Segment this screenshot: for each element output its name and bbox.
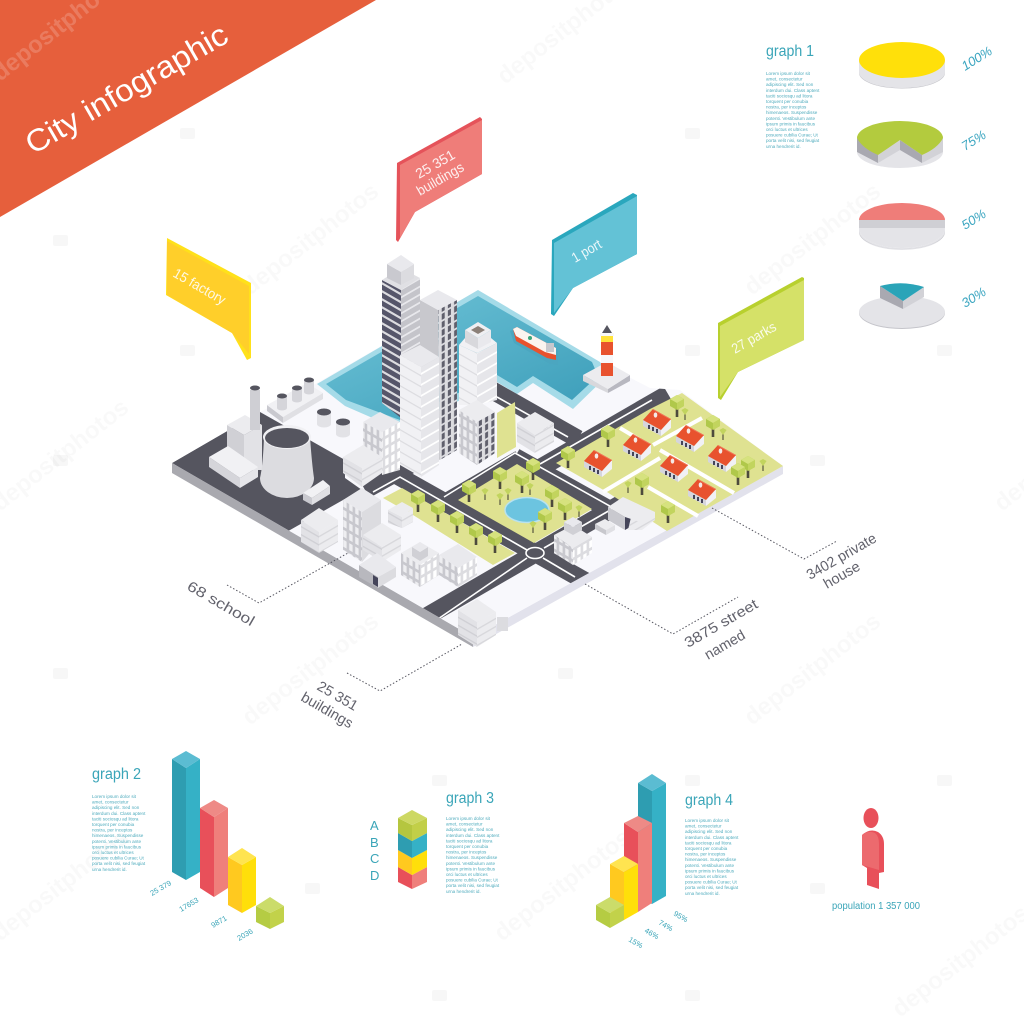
graph 3 legend letters: D [370, 868, 379, 883]
graph 3 text: orci luctus et ultrices [446, 872, 488, 877]
bar value labels: 46% [643, 926, 661, 941]
houses [584, 409, 736, 506]
callout: 27 parks: 27 parks [728, 318, 779, 357]
bar: 2036 [236, 897, 284, 943]
callout: 27 parks [718, 277, 804, 400]
graph 2 text: taciti sociosqu ad litora [92, 816, 139, 821]
leader: 3875 street named: named [702, 627, 748, 663]
callout: 25 351 buildings: 25 351 [412, 146, 458, 182]
graph 2 text: urna hendrerit id. [92, 867, 127, 872]
graph 4 text: torquent per conubia [685, 846, 728, 851]
population label: population 1 357 000 [832, 901, 920, 912]
graph 4 heading: graph 4 [685, 792, 733, 809]
watermarks: depositphotos [739, 178, 886, 301]
leader: 68 school [184, 553, 348, 630]
bar: 9871: 9871 [210, 914, 228, 930]
building: small stack [388, 502, 413, 528]
leader: 68 school: 68 school [184, 579, 257, 630]
storage tanks [317, 408, 350, 438]
bar: 9871 [210, 848, 256, 930]
pie: 75% [857, 121, 989, 168]
stacked column: graph 3 [398, 810, 427, 889]
graph 2 heading: graph 2 [92, 766, 141, 783]
graph 1 text: taciti sociosqu ad litora [766, 93, 813, 98]
graph 4 text: interdum dui. Class aptent [685, 835, 739, 840]
graph 3 legend letters: C [370, 851, 379, 866]
bar value labels: 15% [627, 935, 645, 950]
graph 1 text: posuere cubilia Curae; Ut [766, 133, 819, 138]
graph 2 text: amet, consectetur [92, 800, 129, 805]
graph 4 text: orci luctus et ultrices [685, 874, 727, 879]
block with windows [459, 400, 495, 465]
graph 2 text: himenaeos. Suspendisse [92, 833, 144, 838]
watermarks: depositphotos [237, 178, 384, 301]
housing block lawn [556, 393, 783, 531]
low stacked block [343, 445, 382, 487]
watermarks: depositphotos [237, 608, 384, 731]
graph 1 text: Lorem ipsum dolor sit [766, 71, 811, 76]
bar value labels: 95% [672, 909, 690, 924]
graph 2 text: potenti. Vestibulum ante [92, 839, 141, 844]
building: garage [359, 553, 396, 588]
building: school tower [343, 488, 381, 562]
bar: 2036: 2036 [236, 927, 254, 943]
graph 3 text: torquent per conubia [446, 844, 489, 849]
graph 3 text: nostra, per inceptos [446, 850, 487, 855]
graph 1 text: urna hendrerit id. [766, 144, 801, 149]
graph 2 text: adipiscing elit. Sed non [92, 805, 140, 810]
graph 2 text: torquent per conubia [92, 822, 135, 827]
callout: 25 351 buildings [396, 117, 482, 242]
graph 3 text: porta velit nisi, sed feugiat [446, 883, 500, 888]
pie: 50%: 50% [959, 206, 989, 233]
callout: 1 port: 1 port [568, 236, 604, 266]
graph 2 text: Lorem ipsum dolor sit [92, 794, 137, 799]
graph 4 text: amet, consectetur [685, 824, 722, 829]
graph 1 text: ipsum primis in faucibus [766, 121, 816, 126]
graph 4 text: taciti sociosqu ad litora [685, 840, 732, 845]
roundabout [526, 548, 544, 558]
leader: 3875 street named: 3875 street [682, 597, 761, 651]
crossing building with cap [554, 517, 592, 565]
callout: 15 factory: 15 factory [170, 265, 229, 308]
trees [411, 395, 767, 553]
graph 3 legend letters: B [370, 835, 379, 850]
graph 1 text: nostra, per inceptos [766, 105, 807, 110]
graph 1 text: himenaeos. Suspendisse [766, 110, 818, 115]
title: City infographic [19, 17, 234, 161]
graph 4 text: Lorem ipsum dolor sit [685, 818, 730, 823]
graph 2 text: interdum dui. Class aptent [92, 811, 146, 816]
building behind tower [363, 412, 400, 475]
leader: 25 351 buildings: buildings [298, 690, 356, 732]
park: rear patch [497, 402, 516, 458]
watermarks: depositphotos [739, 608, 886, 731]
bar: 74% [624, 816, 652, 912]
bar value labels [627, 909, 690, 950]
graph 4 text: himenaeos. Suspendisse [685, 857, 737, 862]
bar: 25 379 [148, 751, 200, 898]
graph 3 text: amet, consectetur [446, 822, 483, 827]
callout: 25 351 buildings: buildings [414, 159, 467, 199]
bar: 46% [610, 856, 638, 920]
graph 4 text: porta velit nisi, sed feugiat [685, 885, 739, 890]
building: twin school [439, 544, 477, 587]
right stepped tower [459, 322, 497, 405]
graph 3 legend letters: A [370, 818, 379, 833]
graph 3 text: himenaeos. Suspendisse [446, 855, 498, 860]
title banner [0, 0, 376, 217]
leader: 3875 street named [585, 584, 761, 663]
building: front block [363, 523, 401, 562]
bar: 25 379: 25 379 [148, 878, 173, 898]
park: left strip [383, 488, 515, 565]
graph 4 text: urna hendrerit id. [685, 891, 720, 896]
graph 4 text: posuere cubilia Curae; Ut [685, 880, 738, 885]
graph 4 text: nostra, per inceptos [685, 852, 726, 857]
pie: 100%: 100% [959, 43, 995, 74]
graph 4 text: potenti. Vestibulum ante [685, 863, 734, 868]
graph 3 legend letters [370, 818, 379, 883]
tall striped tower [382, 255, 420, 418]
graph 3 text: urna hendrerit id. [446, 889, 481, 894]
park: centre [458, 464, 592, 543]
garage group [595, 497, 655, 535]
bar: 95% [638, 774, 666, 904]
ship [510, 327, 558, 365]
pie: 100% [859, 42, 995, 88]
windowed tower [420, 290, 457, 460]
isometric city map [172, 255, 783, 647]
graph 1 heading: graph 1 [766, 43, 814, 60]
harbour water [317, 290, 608, 430]
pond [505, 498, 549, 522]
graph 1 text: interdum dui. Class aptent [766, 88, 820, 93]
graph 2 text: nostra, per inceptos [92, 828, 133, 833]
city plate [172, 290, 783, 647]
watermarks: depositphotos [489, 824, 636, 947]
graph 3 text: potenti. Vestibulum ante [446, 861, 495, 866]
graph 1 text: amet, consectetur [766, 77, 803, 82]
bar value labels: 74% [657, 918, 675, 933]
leader: 3402 private house: house [821, 559, 863, 592]
corner building [458, 599, 508, 647]
leader: 3402 private house [712, 508, 880, 592]
leader: 25 351 buildings: 25 351 [314, 679, 360, 715]
graph 3 text: Lorem ipsum dolor sit [446, 816, 491, 821]
graph 1 text: orci luctus et ultrices [766, 127, 808, 132]
icon: population person [862, 808, 884, 889]
pie: 50% [859, 203, 989, 250]
white striped tower [400, 345, 439, 477]
road network [172, 389, 668, 626]
graph 2 text: orci luctus et ultrices [92, 850, 134, 855]
graph 3 text: adipiscing elit. Sed non [446, 827, 494, 832]
callout: 1 port [551, 193, 637, 316]
graph 1 text: porta velit nisi, sed feugiat [766, 138, 820, 143]
lighthouse [583, 325, 630, 393]
graph 3 text: taciti sociosqu ad litora [446, 838, 493, 843]
bar: 17653 [178, 800, 228, 914]
graph 2 text: ipsum primis in faucibus [92, 844, 142, 849]
bar chart: graph 2 [148, 751, 284, 943]
block by the crossing [517, 412, 554, 453]
callout: 15 factory [166, 238, 251, 360]
building: striped block [301, 508, 338, 553]
pie: 75%: 75% [959, 127, 989, 154]
graph 3 heading: graph 3 [446, 790, 494, 807]
graph 1 text: adipiscing elit. Sed non [766, 82, 814, 87]
leader: 3402 private house: 3402 private [804, 531, 880, 583]
graph 1 text: potenti. Vestibulum ante [766, 116, 815, 121]
bar: 15% [596, 897, 624, 928]
factory [209, 386, 330, 505]
factory pier with tanks [267, 378, 323, 423]
lower-left buildings [301, 488, 477, 588]
graph 3 text: ipsum primis in faucibus [446, 866, 496, 871]
graph 4 text: ipsum primis in faucibus [685, 868, 735, 873]
graph 4 text: adipiscing elit. Sed non [685, 829, 733, 834]
graph 2 text: porta velit nisi, sed feugiat [92, 861, 146, 866]
graph 1 text: torquent per conubia [766, 99, 809, 104]
building: school with cap [401, 542, 439, 587]
graph 2 text: posuere cubilia Curae; Ut [92, 856, 145, 861]
leader: 25 351 buildings [298, 644, 462, 732]
pie: 30%: 30% [959, 284, 989, 311]
graph 3 text: interdum dui. Class aptent [446, 833, 500, 838]
pie: 30% [859, 283, 989, 329]
bar chart: graph 4 [596, 774, 690, 950]
watermarks: depositphotos [487, 394, 634, 517]
graph 3 text: posuere cubilia Curae; Ut [446, 878, 499, 883]
bar: 17653: 17653 [178, 896, 200, 914]
